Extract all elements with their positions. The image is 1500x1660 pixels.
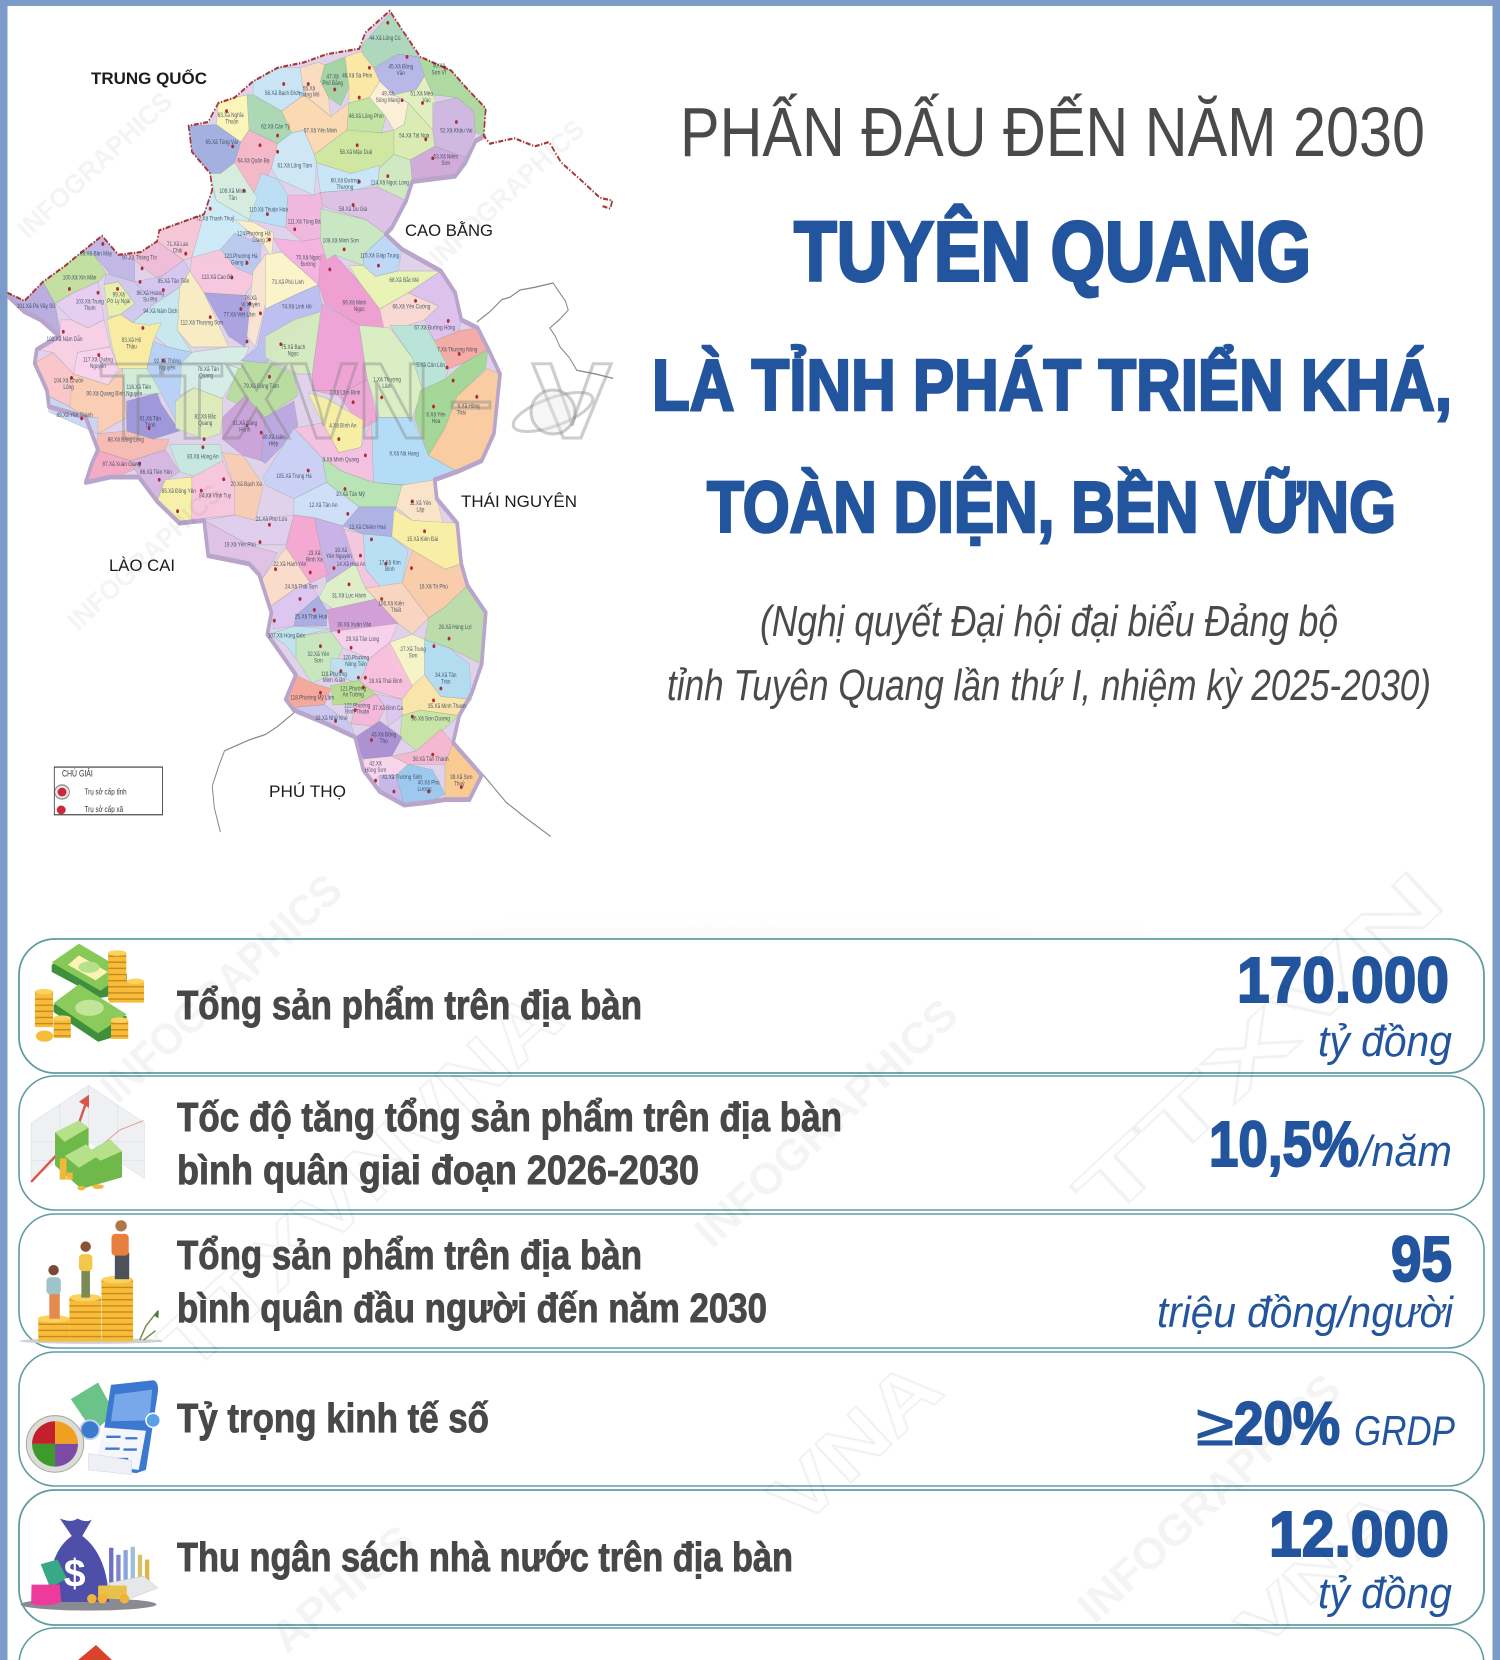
value: 20%: 20% <box>1234 1390 1340 1457</box>
commune names: 31.Xã Lực Hành <box>332 593 366 600</box>
label: digital economy: Tỷ trọng kinh tế số <box>177 1395 489 1441</box>
commune names: Thiết <box>391 608 402 614</box>
neighbouring region names: CAO BẰNG <box>405 221 493 240</box>
commune names: Su Phì <box>143 297 158 304</box>
commune names: 72.Xã Thanh Thuỷ <box>196 215 234 223</box>
commune names: 47.Xã <box>327 74 340 81</box>
value: at least: ≥ <box>1196 1393 1234 1458</box>
commune names: Giang 2 <box>252 237 269 244</box>
commune names: Nông Tiến <box>345 662 367 669</box>
commune names: 107.Xã Hùng Đức <box>268 633 305 640</box>
commune names: Nguyên <box>159 365 175 372</box>
commune names: 52.Xã Khâu Vai <box>440 128 472 135</box>
commune names: Sơn <box>314 658 323 665</box>
commune names: Trịnh <box>145 423 155 429</box>
commune names: 122.Phường <box>344 703 370 710</box>
commune names: Bình Xa <box>306 557 323 564</box>
commune names: 58.Xã Mậu Duệ <box>340 149 372 156</box>
commune names: 91.Xã Tân <box>139 416 161 423</box>
commune names <box>17 36 480 793</box>
neighbouring region names: LÀO CAI <box>109 556 175 575</box>
commune names: 124.Phường Hà <box>237 231 271 238</box>
commune names: 71.Xã Lao <box>167 242 188 248</box>
neighbouring region names: TRUNG QUỐC <box>91 68 207 88</box>
commune names: Trào <box>441 679 450 686</box>
label: per capita line 2: bình quân đầu người đến năm 2030 <box>177 1285 767 1331</box>
commune names: 37.Xã Bình Ca <box>373 706 404 712</box>
commune names: 38.Xã Tân Thành <box>413 757 449 763</box>
commune names: 61.Xã Lũng Tám <box>277 163 312 170</box>
commune names: 6.Xã Yên <box>426 412 446 419</box>
value: 10,5%: 10,5% <box>1209 1108 1359 1180</box>
commune names: 49.Xã <box>382 91 395 98</box>
unit: million dong per person: triệu đồng/người <box>1157 1288 1454 1337</box>
icon: money and coins <box>35 944 144 1042</box>
commune names: 117.Xã Quảng <box>83 357 113 364</box>
commune names: 81.Xã Bằng <box>233 419 257 427</box>
commune names: An Tường <box>342 692 364 699</box>
communes <box>7 14 500 805</box>
commune names: Lập <box>417 507 424 514</box>
commune names: 103.Xã Trung <box>76 299 104 306</box>
watermarks: INFOGRAPHICS <box>424 114 590 272</box>
commune names: 108.Xã Minh Sơn <box>323 238 359 245</box>
commune names: Minh Xuân <box>323 677 345 684</box>
commune names: Hành <box>239 427 251 434</box>
commune names: Lũng <box>63 385 74 391</box>
internal province border <box>7 136 500 805</box>
commune names: Văn <box>397 70 405 77</box>
commune names: 35.Xã Minh Thanh <box>428 703 466 710</box>
label: per capita line 1: Tổng sản phẩm trên địa bàn <box>177 1232 642 1278</box>
commune names: 62.Xã Cán Tỷ <box>261 123 290 131</box>
commune names: 3.Xã Minh Quang <box>323 457 359 464</box>
watermarks: VNA <box>754 1344 958 1542</box>
province base shape <box>7 11 500 805</box>
commune names: 33.Xã Nhữ Khê <box>315 715 348 722</box>
commune names: Ngọc <box>354 307 365 313</box>
commune names: 116.Xã Tiên <box>126 385 151 391</box>
commune names: 102.Xã Nậm Dẫn <box>47 335 82 343</box>
commune names: 94.Xã Nậm Dịch <box>143 308 177 315</box>
legend: CHÚ GIẢI <box>62 766 93 779</box>
legend: Trụ sở cấp xã <box>84 804 124 814</box>
commune names: 20.Xã Bạch Xa <box>231 482 263 489</box>
icon: growth chart with money <box>31 1085 145 1190</box>
commune names: 83.Xã Hùng An <box>187 454 219 461</box>
neighbouring region names: PHÚ THỌ <box>269 782 346 801</box>
subtitle line 1: (Nghị quyết Đại hội đại biểu Đảng bộ <box>760 597 1338 646</box>
legend <box>54 766 162 815</box>
commune names: 110.Xã Thuận Hoà <box>249 207 289 214</box>
commune names: 45.Xã Đồng <box>388 64 413 71</box>
label: budget revenue: Thu ngân sách nhà nước trên địa bàn <box>177 1534 793 1580</box>
commune names: 113.Xã Cao Bồ <box>201 275 233 281</box>
commune names: Tân <box>229 196 237 202</box>
commune names: Lâm <box>382 384 392 390</box>
watermarks: INFOGRAPHICS <box>12 86 178 244</box>
commune names: 8.Xã Hồng <box>458 404 480 410</box>
commune seats <box>63 23 477 791</box>
commune names: 14.Xã Hoà An <box>337 561 365 568</box>
commune names: 114.Xã Ngọc Long <box>371 180 409 187</box>
commune names: 120.Phường <box>343 655 369 662</box>
watermarks: VNA <box>374 974 578 1172</box>
commune names: 106.Xã Kiến <box>378 601 404 608</box>
commune names: Hiệp <box>269 441 278 448</box>
icon: money bag <box>21 1518 158 1611</box>
commune names: 111.Xã Tùng Bá <box>288 219 321 226</box>
commune names: Thuỷ <box>454 780 465 788</box>
commune names: 28.Xã Thái Bình <box>369 679 402 685</box>
commune names: Sơn <box>409 653 417 660</box>
commune names: 88.Xã Bằng Lang <box>108 436 144 444</box>
commune names: 96.Xã Hoàng <box>137 290 164 297</box>
commune names: 73.Xã Phú Linh <box>272 280 304 286</box>
commune names: 5.Xã Côn Lôn <box>416 362 445 369</box>
commune names: 66.Xã Yên Cường <box>393 304 430 311</box>
commune names: 100.Xã Xín Mần <box>63 275 96 282</box>
panel: per capita <box>19 1214 1484 1348</box>
commune names: 1.Xã Thượng <box>373 377 401 384</box>
label: period: bình quân giai đoạn 2026-2030 <box>177 1147 699 1193</box>
neighbouring region names <box>91 68 577 801</box>
commune names: 26.Xã Hùng Lợi <box>439 624 472 631</box>
watermarks: TTXVN <box>144 1107 436 1387</box>
legend: Trụ sở cấp tỉnh <box>84 787 127 797</box>
map: Tuyên Quang province <box>7 11 613 836</box>
commune names: 48.Xã Lũng Phìn <box>349 114 384 120</box>
unit: tỷ đồng: tỷ đồng <box>1318 1569 1452 1618</box>
commune names: 79.Xã Đồng Tâm <box>244 384 279 390</box>
value: 12.000: 12.000 <box>1269 1498 1449 1570</box>
commune names: Sủng Máng <box>376 96 400 104</box>
panel: state budget revenue <box>19 1490 1484 1625</box>
commune names: Nguyên <box>90 364 106 370</box>
commune names: 118.Phường Mỹ Lâm <box>290 695 335 702</box>
watermarks: INFOGRAPHICS <box>1068 1365 1350 1632</box>
commune names: 41.Xã Trường Sinh <box>382 774 422 781</box>
commune names: 93.Xã Hồ <box>122 338 141 344</box>
commune names: 27.Xã Trung <box>400 647 426 653</box>
commune names: 23.Xã <box>308 551 321 557</box>
commune names: 60.Xã Đường <box>331 178 359 185</box>
value: 95: 95 <box>1391 1223 1452 1295</box>
commune names: 17.Xã Kim <box>379 560 401 567</box>
commune names: 50.Xã <box>433 63 446 70</box>
commune names: 64.Xã Quản Bạ <box>237 158 270 165</box>
commune names: 36.Xã Sơn Dương <box>411 716 450 723</box>
commune names: Bình <box>385 566 395 573</box>
panel: growth rate <box>19 1076 1484 1210</box>
commune names: 24.Xã Thái Sơn <box>285 584 318 591</box>
commune names: 46.Xã Sà Phìn <box>342 73 372 80</box>
commune names: 105.Xã Trung Hà <box>276 474 312 480</box>
commune names: 7.Xã Thượng Nông <box>437 347 477 354</box>
commune names: 75.Xã Bạch <box>281 345 305 351</box>
icon: pie chart and payment <box>26 1380 160 1475</box>
commune names: 44.Xã Lũng Cú <box>369 36 401 42</box>
neighbouring borders <box>212 283 613 836</box>
commune names: 80.Xã Liên <box>262 435 285 441</box>
commune names: 99.Xã <box>113 292 126 299</box>
commune names: Chải <box>173 248 182 255</box>
commune names: 86.Xã Tiên Yên <box>140 469 172 476</box>
commune names: 15.Xã Kiên Đài <box>407 536 438 543</box>
commune names: Hoa <box>432 418 441 425</box>
commune names: 54.Xã Tát Ngà <box>399 133 430 140</box>
commune names: 53.Xã Niêm <box>434 154 458 161</box>
commune names: Vị Xuyên <box>241 302 260 309</box>
commune names: 51.Xã Mèo <box>410 91 433 98</box>
commune names: Ngọc <box>288 351 299 358</box>
commune names: Quang <box>198 420 212 427</box>
commune names: 109.Xã Minh <box>220 188 246 195</box>
commune names: 104.Xã Chuồn <box>54 378 84 385</box>
commune names: Sơn <box>441 160 450 167</box>
commune names: 92.Xã Thông <box>154 359 181 365</box>
commune names: 77.Xã Việt Lâm <box>224 312 256 319</box>
commune names: 121.Phường <box>340 686 366 693</box>
commune names: 55.Xã <box>303 86 316 93</box>
value: 170.000: 170.000 <box>1237 944 1449 1016</box>
commune names: 57.Xã Yên Minh <box>304 128 337 135</box>
unit: per year: /năm <box>1357 1127 1452 1176</box>
commune names: 87.Xã Xuân Giang <box>103 462 141 468</box>
TTXVN map watermark: TTXVN <box>100 340 430 461</box>
commune names: 115.Xã Giáp Trung <box>360 253 399 260</box>
commune names: 112.Xã Thượng Sơn <box>180 320 223 327</box>
commune names: 13.Xã Chiêm Hoá <box>349 525 387 531</box>
commune names: 22.Xã Hàm Yên <box>273 561 306 568</box>
commune names: Phố Bằng <box>322 79 343 87</box>
commune names: 78.Xã Tân <box>197 366 219 373</box>
commune names: 40.Xã Phú <box>418 780 440 787</box>
commune names: 70.Xã Ngọc <box>296 255 321 262</box>
unit: tỷ đồng: tỷ đồng <box>1318 1017 1452 1066</box>
commune names: Thuận <box>225 119 238 126</box>
commune names: 69.Xã Minh <box>342 300 366 307</box>
commune names: 59.Xã Du Già <box>339 206 368 213</box>
watermarks: TTXVN <box>1059 855 1460 1237</box>
heading: Tuyên Quang: TUYÊN QUANG <box>794 204 1311 298</box>
commune names: 98.Xã Bản Máy <box>80 251 112 258</box>
commune names: Thịnh <box>84 306 96 312</box>
icon: red roof <box>78 1645 112 1660</box>
commune names: 97.Xã Thàng Tín <box>122 255 157 262</box>
commune names: 90.Xã Quang Bình Nguyên <box>86 391 142 398</box>
commune names: 123.Phường Hà <box>224 254 258 260</box>
watermarks: INFOGRAPHICS <box>62 478 228 636</box>
unit: GRDP: GRDP <box>1354 1407 1455 1454</box>
commune names: 30.Xã Xuân Vân <box>337 622 371 629</box>
commune names: Đường <box>301 262 316 268</box>
watermarks: APHICS <box>262 1516 424 1660</box>
title block <box>652 93 1452 710</box>
commune names: 95.Xã Tân Tiến <box>158 278 189 285</box>
commune names: Thái <box>457 410 466 417</box>
commune names: 84.Xã Vĩnh Tuy <box>199 493 231 500</box>
commune names: Yên Nguyên <box>326 553 352 560</box>
commune names: 89.Xã Yên Thành <box>57 412 93 419</box>
commune names: 101.Xã Pà Vầy Sủ <box>17 302 55 310</box>
commune names: 10.Xã Tân Mỹ <box>336 492 365 498</box>
icon: money bag: $ <box>64 1553 86 1595</box>
commune names: 19.Xã Yên Phú <box>224 542 256 549</box>
commune names: Bình Thuận <box>345 709 369 716</box>
panel: digital economy <box>19 1352 1484 1486</box>
commune names: 9.Xã Nà Hang <box>389 451 419 458</box>
label: growth rate: Tốc độ tăng tổng sản phẩm trên địa bàn <box>177 1094 842 1140</box>
commune names: Thắng Mố <box>298 91 320 99</box>
commune names: 119.Phường <box>321 671 347 678</box>
commune names: Quang <box>199 373 213 380</box>
commune names: 56.Xã Bạch Đích <box>265 90 300 97</box>
watermarks: INFOGRAPHICS <box>91 865 352 1112</box>
commune names: Lương <box>418 786 432 793</box>
watermarks: INFOGRAPHICS <box>685 990 967 1257</box>
commune names: 11.Xã Yên <box>410 501 431 507</box>
commune names: 85.Xã Đồng Yên <box>162 488 196 495</box>
commune names: 29.Xã Tân Long <box>346 636 379 643</box>
commune names: 21.Xã Phú Lưu <box>256 516 287 523</box>
commune names: 42.Xã <box>369 761 382 768</box>
panel: gross regional product <box>19 939 1484 1073</box>
commune names: Thọ <box>380 739 388 745</box>
commune names: 43.Xã Đông <box>371 732 396 739</box>
TTXVN map watermark: V <box>532 340 612 461</box>
commune names: 32.Xã Yên <box>308 651 329 658</box>
neighbouring region names: THÁI NGUYÊN <box>461 492 577 511</box>
commune names: 65.Xã Tùng Vài <box>206 140 238 146</box>
commune names: Pờ Ly Ngài <box>107 299 130 305</box>
commune names: Vạc <box>423 97 431 104</box>
TTXVN map watermark <box>100 340 612 461</box>
commune names: 2.Xã Lâm Bình <box>329 390 360 397</box>
panel: row 6 (partially visible) <box>19 1628 1484 1660</box>
commune names: 68.Xã Bắc Mê <box>389 276 419 284</box>
label: GRDP: Tổng sản phẩm trên địa bàn <box>177 982 642 1028</box>
commune names: 18.Xã <box>335 547 348 554</box>
commune names: Thầu <box>126 344 137 351</box>
commune names: 12.Xã Tân An <box>309 502 337 509</box>
commune names: 39.Xã Sơn <box>450 774 472 781</box>
commune names: 76.Xã <box>245 295 258 302</box>
commune names: 74.Xã Linh Hồ <box>282 304 312 311</box>
China border <box>7 11 612 301</box>
commune names: 67.Xã Đường Hồng <box>414 325 455 332</box>
commune names: Sơn Vĩ <box>432 70 446 77</box>
commune names: 63.Xã Nghĩa <box>218 113 244 119</box>
commune names: Thượng <box>336 185 353 191</box>
commune names: 4.Xã Bình An <box>329 423 357 430</box>
commune names: Giang 1 <box>231 260 247 267</box>
icon: people on coin stacks <box>19 1220 163 1344</box>
commune names: Hồng Sơn <box>365 767 386 774</box>
commune names: 82.Xã Bắc <box>195 413 216 421</box>
watermarks: VNA <box>1223 1476 1415 1660</box>
commune names: 25.Xã Thái Hoà <box>295 614 328 621</box>
commune names: 16.Xã Tri Phú <box>419 584 448 591</box>
commune names: 34.Xã Tân <box>435 673 457 679</box>
